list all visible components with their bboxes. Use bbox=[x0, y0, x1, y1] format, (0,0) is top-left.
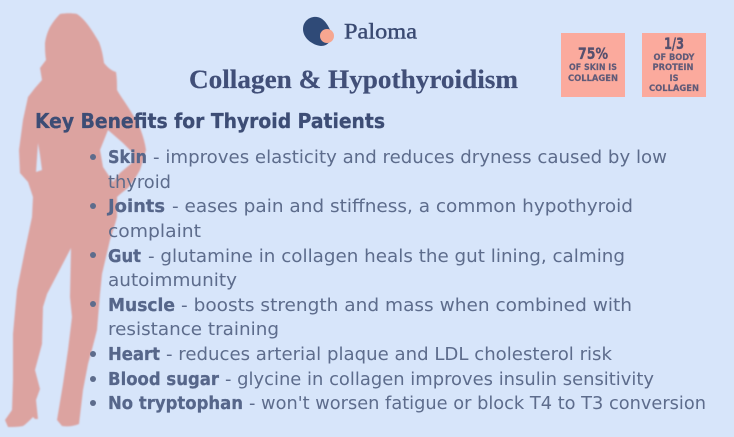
item: muscle bbox=[108, 296, 632, 340]
item: gut bbox=[108, 247, 625, 291]
item: joints bbox=[107, 197, 633, 242]
item: skin: thyroid bbox=[108, 173, 171, 193]
item: joints: Joints bbox=[107, 197, 165, 217]
stat box: 1/3 bbox=[642, 33, 706, 97]
logo wordmark: Paloma bbox=[344, 18, 417, 44]
item: skin bbox=[108, 148, 667, 193]
item: muscle: Muscle bbox=[108, 296, 175, 316]
logo bbox=[303, 17, 417, 46]
stat box: 75% bbox=[561, 33, 625, 97]
item: blood sugar: Blood sugar bbox=[108, 370, 219, 390]
item: skin: - improves elasticity and reduces dryness caused by low bbox=[153, 148, 667, 168]
stat box: 1/3: COLLAGEN bbox=[649, 83, 699, 93]
item: heart: Heart bbox=[108, 345, 160, 365]
item: no tryptophan: No tryptophan bbox=[108, 394, 243, 414]
stat box: 1/3: OF BODY bbox=[654, 52, 695, 62]
benefits list bbox=[90, 148, 706, 414]
bullets bbox=[90, 154, 96, 406]
stat box: 1/3: PROTEIN bbox=[652, 62, 694, 72]
item: skin: Skin bbox=[108, 148, 147, 168]
logo blob bbox=[303, 17, 331, 46]
heading: Key Benefits for Thyroid Patients bbox=[35, 109, 385, 133]
stat box: 75%: OF SKIN IS bbox=[569, 62, 617, 72]
item: no tryptophan: - won't worsen fatigue or block T4 to T3 conversion bbox=[249, 394, 706, 414]
stat box: 75%: 75% bbox=[578, 44, 608, 63]
item: muscle: resistance training bbox=[108, 320, 279, 340]
item: joints: complaint bbox=[108, 222, 201, 242]
stat box: 1/3: IS bbox=[670, 73, 678, 83]
logo dot bbox=[320, 29, 334, 43]
silhouette of a woman bbox=[5, 13, 146, 427]
item: gut: autoimmunity bbox=[108, 271, 237, 291]
item: muscle: - boosts strength and mass when combined with bbox=[181, 296, 632, 316]
item: blood sugar: - glycine in collagen improves insulin sensitivity bbox=[225, 370, 654, 390]
title: Collagen & Hypothyroidism bbox=[189, 65, 518, 94]
stat box: 1/3: 1/3 bbox=[664, 34, 684, 53]
item: joints: - eases pain and stiffness, a common hypothyroid bbox=[172, 197, 633, 217]
stat box: 75%: COLLAGEN bbox=[568, 73, 618, 83]
item: gut: Gut bbox=[108, 247, 141, 267]
item: gut: - glutamine in collagen heals the gut lining, calming bbox=[148, 247, 625, 267]
item: heart: - reduces arterial plaque and LDL cholesterol risk bbox=[166, 345, 613, 365]
